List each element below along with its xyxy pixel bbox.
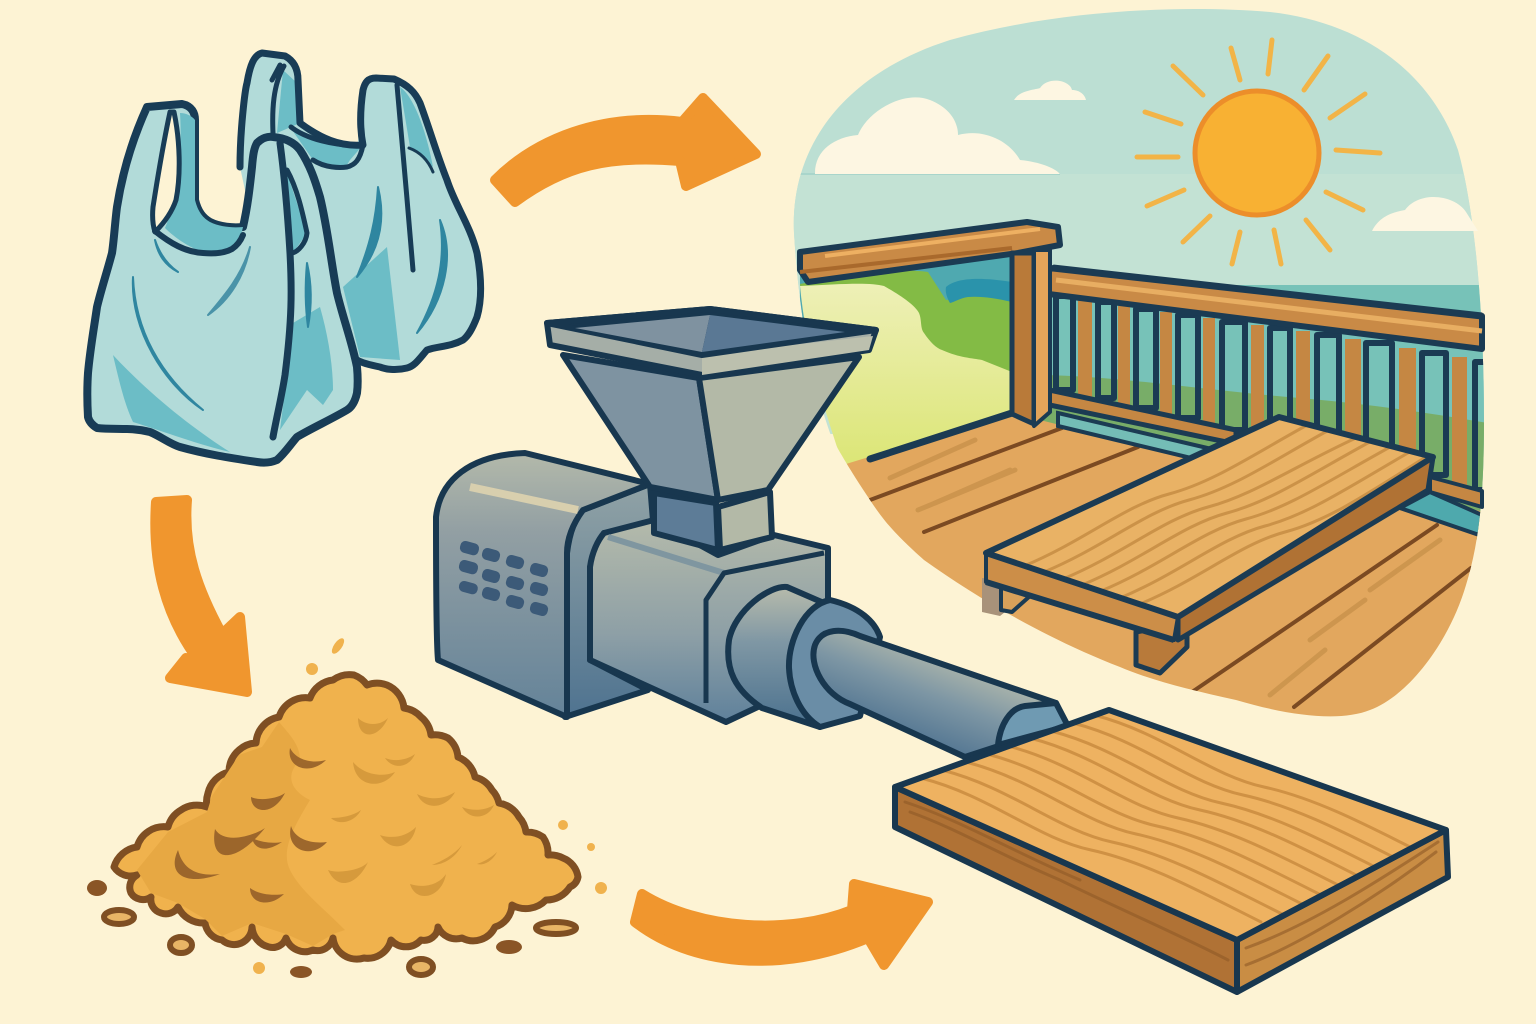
collar	[728, 587, 857, 727]
arrow: bags to deck scene	[495, 98, 756, 202]
cloud: large	[815, 97, 1060, 174]
cloud: small	[1014, 81, 1086, 100]
icon: extruder machine	[436, 309, 1068, 757]
icon: plastic bags	[87, 53, 481, 463]
icon: wood board	[895, 710, 1448, 992]
arrow: bags to pellets	[155, 500, 247, 692]
panel: deck scene	[780, 0, 1500, 740]
neck	[654, 493, 718, 550]
icon: sun	[1137, 40, 1380, 264]
vent slots	[458, 540, 549, 617]
motor side	[565, 484, 654, 717]
barrel end	[998, 703, 1068, 745]
cloud: right	[1372, 197, 1478, 231]
flange	[789, 600, 880, 727]
icon: pellet pile	[87, 636, 607, 978]
deck board sample	[982, 417, 1440, 673]
hopper rim	[547, 309, 876, 375]
back bag	[240, 53, 481, 370]
main body	[590, 520, 828, 722]
barrel	[813, 631, 1066, 757]
front bag	[87, 104, 358, 463]
railing	[800, 222, 1490, 507]
hopper funnel	[563, 355, 718, 500]
arrow: pellets to board	[635, 884, 928, 965]
hopper opening	[575, 315, 710, 352]
motor housing	[436, 453, 650, 717]
